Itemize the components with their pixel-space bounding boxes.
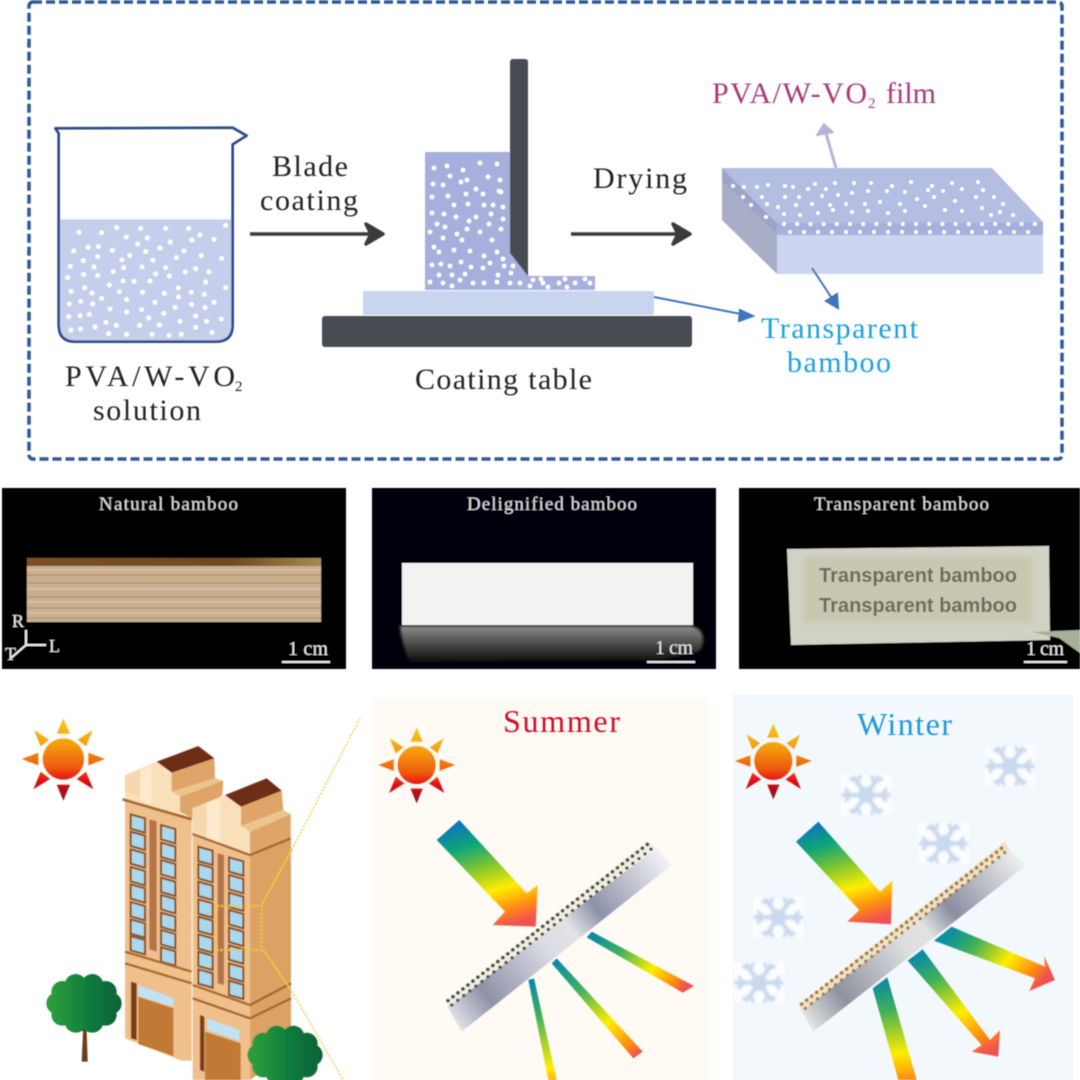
incident light arrow — [437, 820, 538, 927]
text: PVA/W-VO2 solution: 2 — [235, 379, 242, 395]
axes: R L T: R — [12, 611, 24, 631]
transparent sample over printed text: Transparent bamboo — [819, 565, 1017, 587]
winter background — [733, 695, 1073, 1080]
dashed panel border — [29, 2, 1062, 459]
transparent sample over printed text — [787, 546, 1050, 645]
coated film block — [722, 168, 1043, 274]
text: Drying: Drying — [593, 162, 687, 195]
right tower — [192, 778, 291, 1080]
heading: Summer: Summer — [503, 703, 620, 739]
text: PVA/W-VO2 film: PVA/W-VO — [712, 77, 867, 110]
panel: winter — [733, 695, 1073, 1080]
axes: R L T: L — [49, 636, 60, 656]
axes: R L T — [5, 611, 60, 664]
transmitted light arrows — [873, 927, 1055, 1080]
icon: sun — [22, 718, 105, 801]
left tower — [123, 746, 223, 1061]
text: PVA/W-VO2 solution: PVA/W-VO — [65, 360, 235, 393]
white bamboo sample — [402, 563, 693, 625]
heading: Winter: Winter — [857, 706, 952, 742]
text: Transparent bamboo — [761, 312, 919, 379]
icon: tree left — [46, 974, 122, 1062]
scale bar: 1 cm: 1 cm — [655, 637, 693, 659]
incident light arrow — [796, 822, 892, 924]
axes: R L T: T — [5, 644, 16, 664]
text: Coating table: Coating table — [415, 363, 592, 396]
arrow: film block to transparent bamboo label — [812, 268, 838, 308]
magnified-region zoom lines — [217, 718, 360, 1080]
summer background — [372, 698, 709, 1080]
panel: delignified bamboo photo — [372, 488, 716, 669]
arrow: drying step — [571, 224, 690, 244]
icon: sun — [735, 724, 812, 799]
text: PVA/W-VO2 film: 2 — [868, 96, 876, 112]
text: Transparent bamboo: bamboo — [787, 346, 891, 379]
scale bar: 1 cm — [647, 637, 695, 663]
panel: transparent bamboo photo — [739, 488, 1080, 669]
doctor blade — [510, 59, 528, 276]
coated bamboo slab — [445, 842, 672, 1032]
text: Blade coating: coating — [260, 184, 358, 217]
text: Transparent bamboo: Transparent — [761, 312, 919, 345]
transparent bamboo substrate — [363, 291, 654, 315]
arrow: to PVA/W-VO2 film label — [817, 125, 836, 168]
text: Natural bamboo: Natural bamboo — [99, 494, 238, 515]
panel: natural bamboo photo — [2, 488, 346, 669]
text: Delignified bamboo: Delignified bamboo — [467, 494, 637, 515]
panel: blade coating process — [29, 2, 1062, 459]
panel: building illustration — [22, 718, 360, 1080]
scale bar: 1 cm: 1 cm — [1026, 638, 1064, 660]
coating fluid — [425, 152, 595, 290]
icon: tree right — [247, 1026, 323, 1080]
text: PVA/W-VO2 film: film — [886, 77, 936, 110]
coated bamboo slab — [798, 842, 1027, 1032]
text: PVA/W-VO2 solution: solution — [93, 394, 201, 427]
arrow: blade coating step — [250, 224, 383, 244]
transmitted light arrows — [528, 932, 694, 1080]
table — [322, 316, 692, 347]
text: PVA/W-VO2 solution — [65, 360, 242, 427]
coating table apparatus — [322, 59, 692, 347]
text: Transparent bamboo caption: Transparent bamboo — [814, 494, 989, 515]
panel: summer — [372, 698, 709, 1080]
sample reflection — [400, 626, 703, 662]
text: PVA/W-VO2 film — [712, 77, 936, 112]
bamboo sample — [27, 558, 321, 622]
scale bar: 1 cm: 1 cm — [288, 638, 328, 660]
transparent sample over printed text: Transparent bamboo — [819, 595, 1017, 617]
arrow: substrate to transparent bamboo label — [654, 297, 753, 321]
text: Blade coating — [260, 150, 358, 217]
text: Blade coating: Blade — [272, 150, 348, 183]
icon: sun — [378, 728, 455, 803]
backdrop tweezers corner — [1032, 630, 1080, 653]
beaker with PVA/W-VO2 solution — [55, 128, 247, 342]
snowflakes — [734, 746, 1035, 1003]
